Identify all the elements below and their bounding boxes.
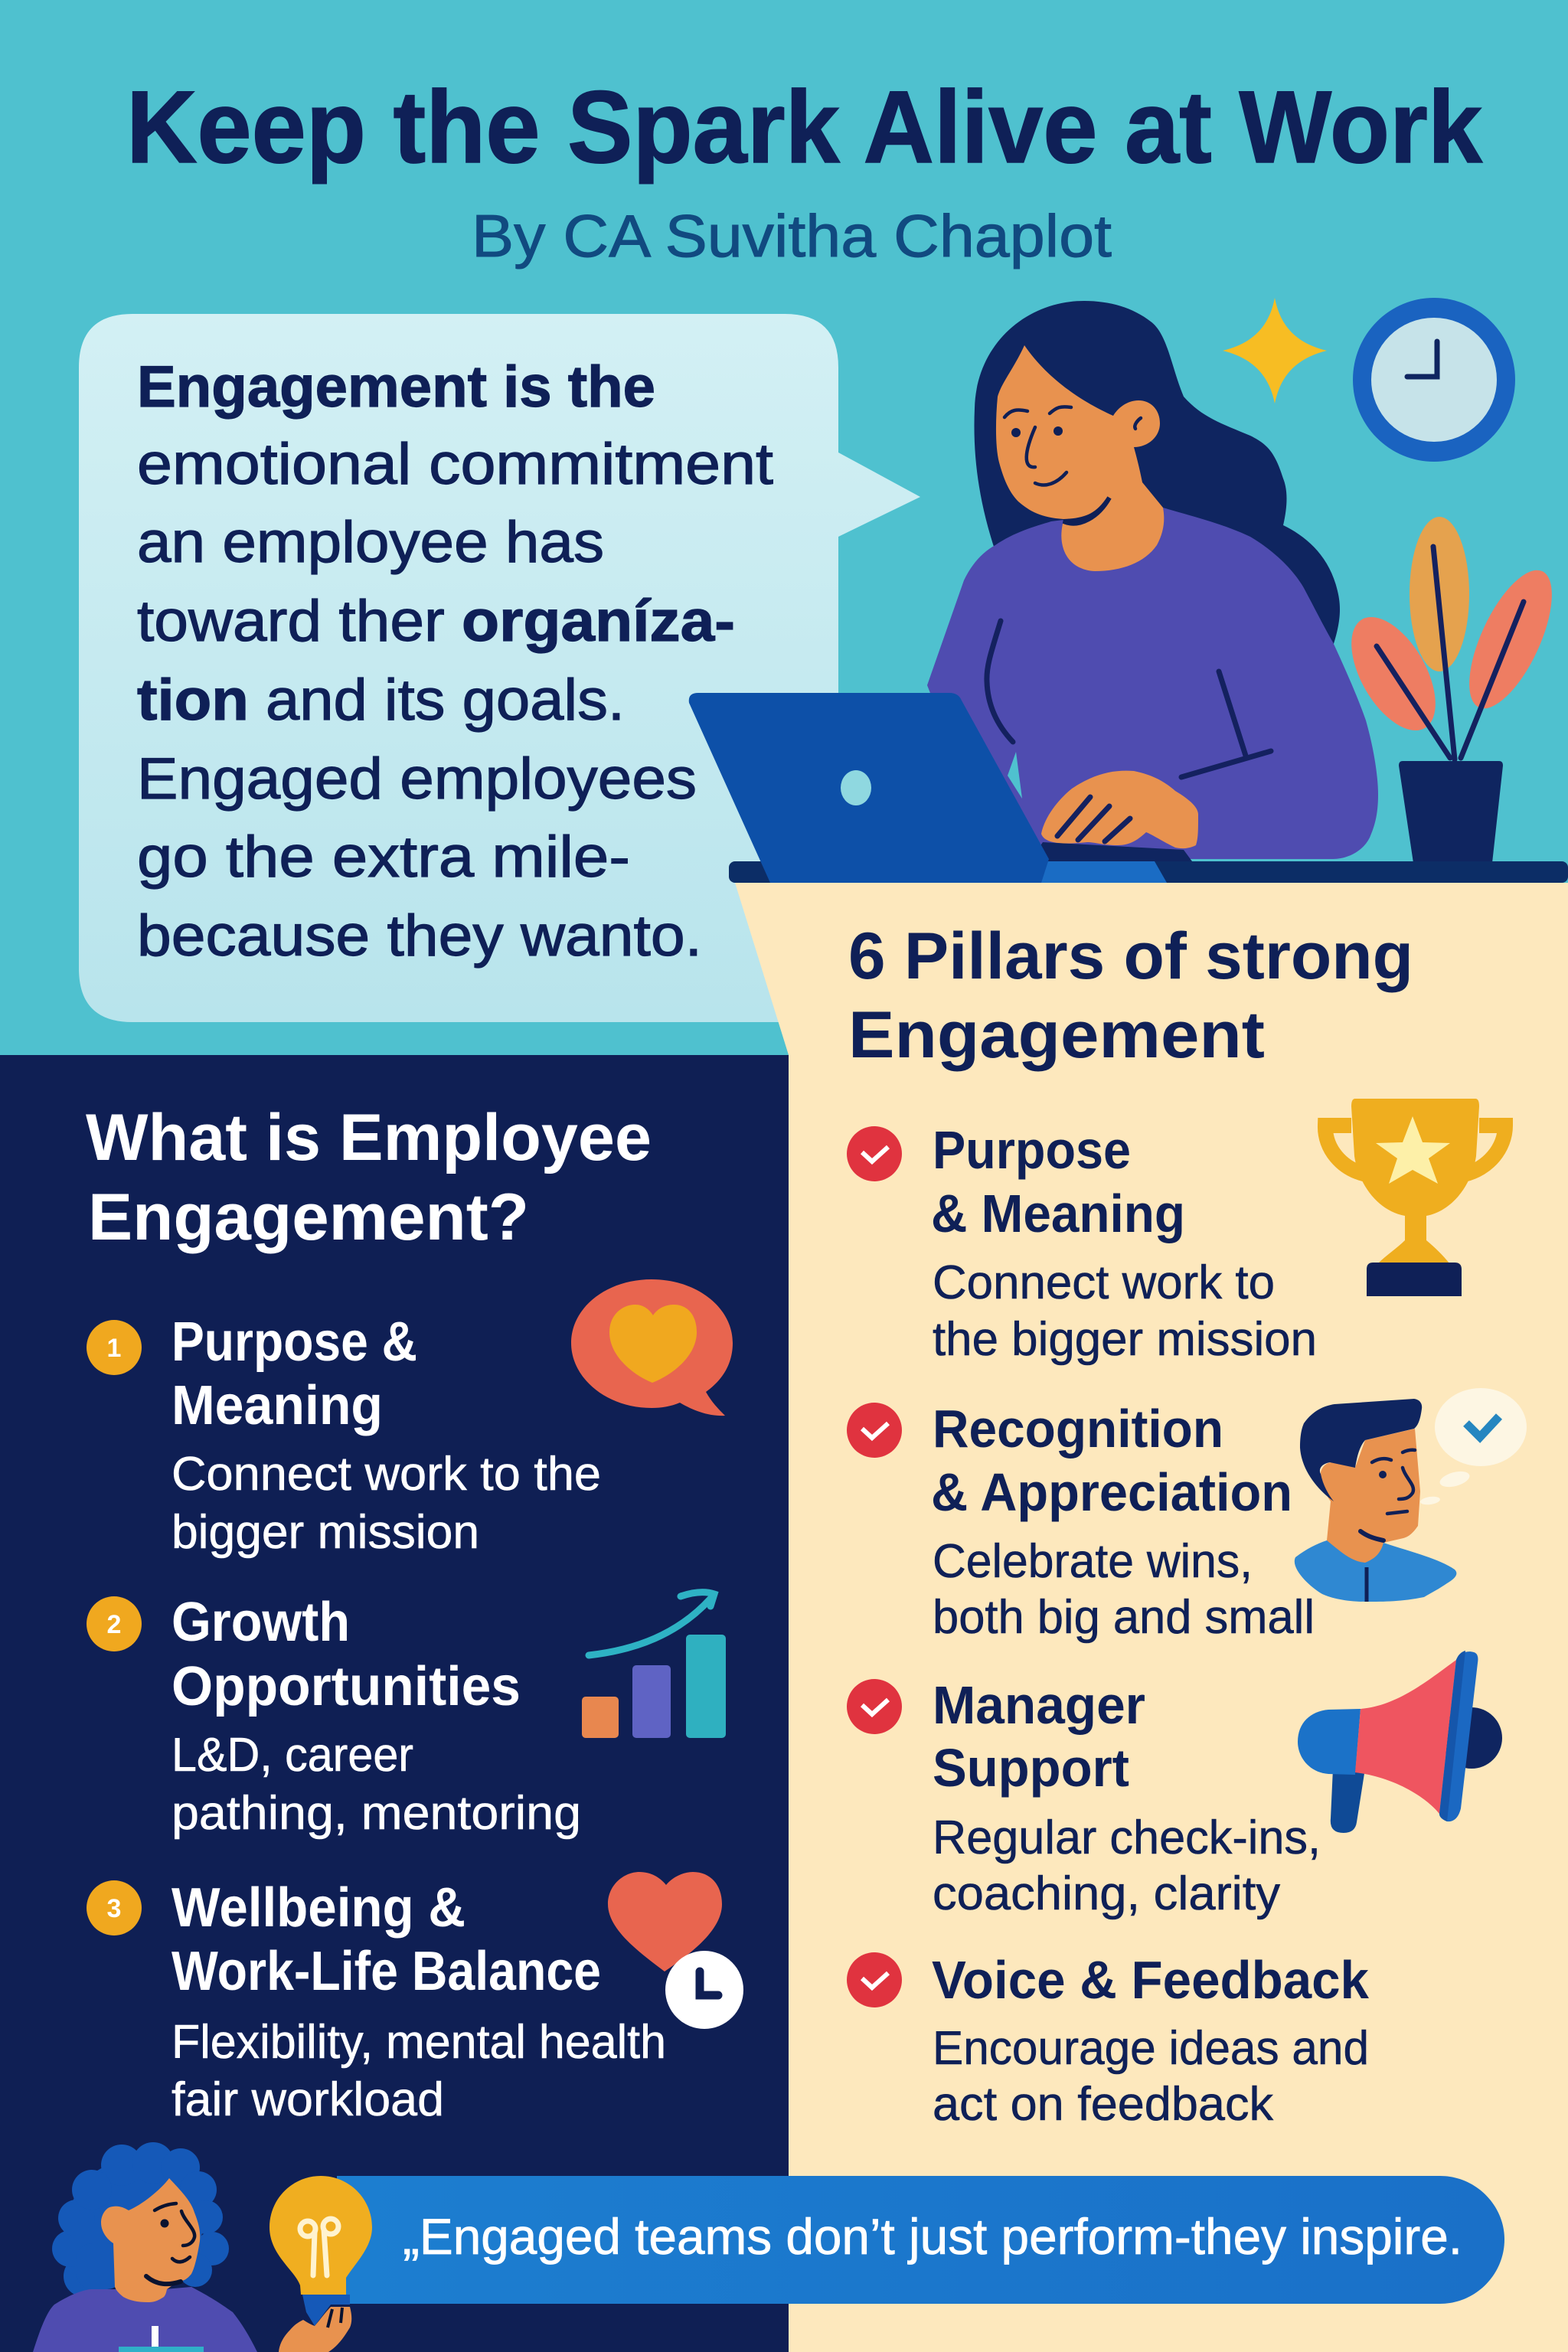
curly hair	[52, 2142, 229, 2297]
desk	[729, 861, 1568, 883]
item 3	[87, 1877, 666, 2126]
pillar: purpose: Connect work to	[933, 1256, 1275, 1309]
pillar: purpose: & Meaning	[931, 1184, 1185, 1243]
speech bubble with definition text: tion and its goals.	[137, 668, 625, 733]
body	[33, 2287, 257, 2352]
item 2: 2	[107, 1610, 121, 1639]
heading	[86, 1101, 652, 1254]
speech bubble with definition text: emotional commitment	[137, 432, 773, 497]
speech bubble with definition text: Engagement is the	[137, 354, 655, 420]
speech bubble with definition text: go the extra mile-	[137, 825, 630, 890]
subtitle: By CA Suvitha Chaplot	[472, 202, 1112, 270]
pillar: voice and feedback: act on feedback	[933, 2078, 1274, 2131]
pillar: manager support	[847, 1675, 1321, 1920]
item 2	[87, 1592, 581, 1840]
facial features	[1004, 407, 1141, 524]
pillar: manager support: Support	[933, 1738, 1129, 1798]
pillar: manager support: Manager	[933, 1675, 1145, 1735]
light bulb	[270, 2176, 372, 2295]
heading	[848, 920, 1413, 1072]
title: Keep the Spark Alive at Work	[126, 70, 1482, 185]
quote banner	[337, 2176, 1504, 2304]
item 1: 1	[107, 1334, 121, 1363]
icon: speech bubble with heart	[571, 1279, 733, 1416]
quote banner: „Engaged teams don’t just perform-they inspire.	[403, 2208, 1462, 2265]
panel: what is employee engagement	[0, 1055, 789, 2352]
filament	[300, 2219, 338, 2275]
arm gap	[1008, 752, 1022, 799]
item 1: Connect work to the	[172, 1448, 601, 1501]
cream panel background	[735, 883, 1568, 2352]
hand	[279, 2307, 351, 2352]
pillar: manager support: coaching, clarity	[933, 1867, 1280, 1920]
item 1: Purpose &	[172, 1312, 417, 1373]
icon: heart with clock	[608, 1872, 743, 2029]
heading: Engagement	[848, 998, 1265, 1072]
pillar: recognition: Celebrate wins,	[933, 1535, 1253, 1588]
item 2: L&D, career	[172, 1729, 413, 1782]
speech bubble with definition text	[79, 314, 920, 1022]
pillar: manager support: Regular check-ins,	[933, 1811, 1321, 1864]
item 1	[87, 1312, 601, 1559]
sparkle star	[1223, 298, 1327, 403]
pillar: purpose	[847, 1120, 1317, 1366]
item 2: Growth	[172, 1592, 350, 1653]
face	[996, 345, 1160, 519]
icon: growth bar chart with arrow	[582, 1592, 726, 1738]
laptop	[689, 693, 1192, 883]
pillar: recognition	[847, 1399, 1315, 1644]
pillar: voice and feedback	[847, 1950, 1369, 2131]
heading: 6 Pillars of strong	[848, 920, 1413, 993]
wall clock	[1353, 298, 1515, 462]
item 2: pathing, mentoring	[172, 1787, 581, 1840]
hand	[1041, 771, 1198, 848]
finger and sleeve lines	[987, 621, 1271, 841]
neck	[1061, 482, 1164, 571]
speech bubble with definition text: because they wanto.	[137, 903, 702, 969]
item 3: Flexibility, mental health	[172, 2016, 666, 2069]
finger lines	[328, 2308, 342, 2328]
woman with light bulb illustration	[33, 2142, 372, 2352]
face	[101, 2178, 200, 2302]
speech bubble with definition text: an employee has	[137, 510, 604, 575]
pillar: recognition: both big and small	[933, 1591, 1315, 1644]
item 3: Work-Life Balance	[172, 1941, 601, 2002]
pillar: purpose: Purpose	[933, 1120, 1131, 1180]
bulb base	[302, 2295, 350, 2326]
item 3: Wellbeing &	[172, 1877, 466, 1939]
speech bubble with definition text: Engaged employees	[137, 746, 697, 812]
sweater	[927, 508, 1378, 859]
item 1: bigger mission	[172, 1506, 479, 1559]
heading: What is Employee	[86, 1101, 652, 1174]
pillar: recognition: Recognition	[933, 1399, 1223, 1459]
item 2: Opportunities	[172, 1656, 521, 1717]
item 1: Meaning	[172, 1375, 383, 1436]
pillar: voice and feedback: Encourage ideas and	[933, 2022, 1369, 2075]
icon: man with thought bubble	[1295, 1388, 1527, 1602]
icon: trophy	[1325, 1099, 1505, 1296]
potted plant	[1334, 517, 1568, 863]
item 3: 3	[107, 1894, 121, 1923]
pen	[152, 2326, 158, 2347]
pillar: recognition: & Appreciation	[931, 1462, 1292, 1522]
facial features	[146, 2203, 194, 2284]
speech bubble with definition text: toward ther organíza-	[137, 589, 735, 654]
panel: six pillars	[847, 920, 1527, 2131]
pillar: voice and feedback: Voice & Feedback	[932, 1950, 1369, 2010]
pillar: purpose: the bigger mission	[933, 1313, 1317, 1366]
icon: megaphone	[1298, 1651, 1502, 1833]
item 3: fair workload	[172, 2073, 444, 2126]
woman at laptop illustration	[927, 301, 1378, 859]
heading: Engagement?	[88, 1181, 529, 1254]
notebook	[119, 2347, 204, 2352]
hair	[974, 301, 1340, 646]
